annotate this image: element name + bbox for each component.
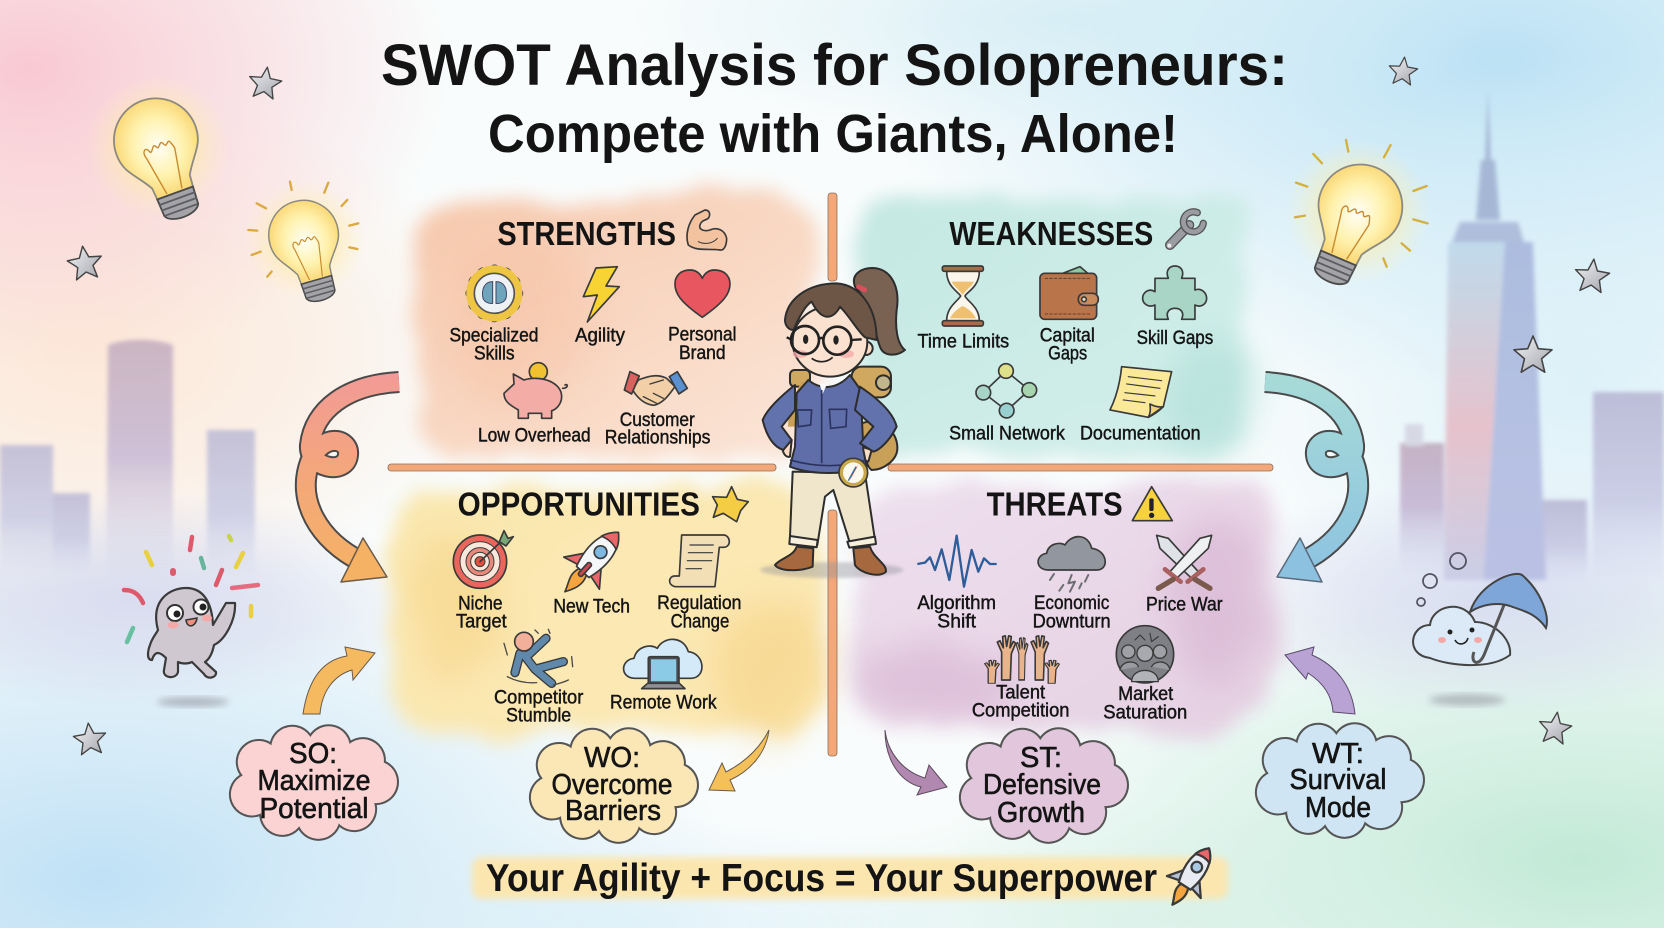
label: algorithm shift [917, 593, 996, 632]
label: economic downturn: Downturn [1033, 611, 1111, 632]
icon: wallet [1040, 267, 1098, 319]
label: regulation change: Change [671, 612, 729, 633]
icon: market saturation crowd [1116, 626, 1174, 683]
icon: target with arrow [453, 531, 513, 588]
icon: flexed muscle [687, 210, 727, 250]
strategy cloud: WO overcome barriers: Overcome [552, 769, 672, 801]
label: economic downturn [1033, 593, 1111, 632]
icon: puzzle piece [1143, 266, 1207, 319]
icon: stumbling competitor [504, 629, 573, 685]
strategy cloud: WT survival mode: Survival [1290, 764, 1386, 796]
strategy cloud: ST defensive growth [974, 742, 1110, 829]
panel wash: weaknesses [854, 198, 1260, 460]
strategy cloud: SO maximize potential: SO: [289, 738, 337, 770]
icon: rocket [547, 516, 636, 608]
skyline right with tall tower [1400, 90, 1664, 580]
strategy arrow: ST [885, 730, 947, 795]
icon: shining light bulb right [1262, 118, 1452, 310]
icon: shining light bulb left [231, 166, 380, 317]
icon: raised hands talent competition [985, 636, 1059, 683]
heading: weaknesses: WEAKNESSES [949, 216, 1153, 253]
icon: storm cloud [1038, 537, 1105, 592]
label: market saturation: Saturation [1103, 702, 1187, 723]
panel: weaknesses [917, 212, 1213, 444]
label: capital gaps [1040, 326, 1095, 364]
mascot: cloud with umbrella [1413, 553, 1547, 706]
icon: regulation scroll [670, 535, 729, 587]
title [381, 33, 1288, 164]
icon: cloud with laptop [624, 639, 702, 689]
icon: wrench [1167, 212, 1203, 248]
strategy cloud: SO maximize potential: Maximize [258, 765, 370, 797]
character: solopreneur with backpack and compass [760, 268, 905, 578]
label: algorithm shift: Algorithm [917, 593, 996, 614]
icon: piggy bank [504, 363, 567, 418]
panel: opportunities [453, 487, 748, 727]
icon: heart personal brand [675, 270, 730, 317]
label: customer relationships: Customer [620, 410, 695, 431]
icon: handshake [624, 372, 687, 405]
strategy cloud: ST defensive growth: Defensive [983, 769, 1101, 801]
arrow: strengths to opportunities loop [306, 382, 399, 582]
label: competitor stumble: Stumble [506, 706, 571, 727]
label: specialized skills: Specialized [449, 326, 538, 347]
strategy cloud: SO maximize potential [244, 738, 380, 825]
panel wash: opportunities [392, 488, 830, 740]
heading: threats: THREATS [987, 487, 1123, 524]
strategy cloud: WT survival mode [1270, 738, 1406, 824]
label: market saturation: Market [1118, 684, 1174, 705]
strategy cloud: WT survival mode: Mode [1305, 792, 1371, 824]
label: personal brand: Personal [668, 325, 736, 346]
label: customer relationships: Relationships [605, 427, 710, 448]
label: new tech: New Tech [553, 596, 630, 617]
label: agility: Agility [575, 326, 625, 347]
label: personal brand [668, 325, 736, 364]
strategy cloud: WT survival mode: WT: [1312, 738, 1364, 770]
icon: small network [976, 364, 1037, 418]
icon: specialized skills badge [470, 269, 518, 317]
icon: small rocket [1156, 837, 1226, 916]
strategy cloud: WO overcome barriers [544, 742, 680, 827]
panel wash: threats [850, 488, 1270, 730]
icon: light bulb top left [66, 54, 251, 242]
strategy cloud: SO maximize potential: Potential [260, 793, 368, 825]
icon: warning triangle [1132, 487, 1172, 521]
label: talent competition: Talent [996, 682, 1046, 703]
strategy arrow: SO [303, 647, 375, 714]
icon: gold star [713, 487, 748, 522]
label: specialized skills: Skills [474, 343, 515, 364]
bottom banner: superpower tagline: Your Agility + Focus = Your Superpower [486, 857, 1157, 900]
strategy cloud: ST defensive growth: Growth [997, 797, 1085, 829]
label: talent competition: Competition [972, 701, 1069, 722]
label: small network: Small Network [949, 423, 1065, 444]
label: skill gaps: Skill Gaps [1137, 328, 1213, 349]
strategy arrow: WT [1285, 647, 1355, 714]
icon: algorithm wave [917, 536, 997, 587]
title: SWOT Analysis for Solopreneurs: [381, 33, 1288, 98]
strategy cloud: WO overcome barriers: Barriers [565, 795, 661, 827]
heading: opportunities: OPPORTUNITIES [458, 487, 700, 524]
label: economic downturn: Economic [1034, 593, 1109, 614]
bottom banner: superpower tagline [472, 837, 1228, 916]
arrow: weaknesses to threats loop [1265, 382, 1358, 582]
label: specialized skills [449, 326, 538, 364]
label: low overhead: Low Overhead [478, 426, 591, 447]
label: capital gaps: Capital [1040, 326, 1095, 347]
label: price war: Price War [1146, 595, 1223, 616]
label: regulation change [657, 593, 741, 633]
label: remote work: Remote Work [610, 692, 717, 713]
panel: strengths [449, 210, 736, 448]
label: talent competition [972, 682, 1069, 722]
label: personal brand: Brand [679, 343, 726, 364]
label: time limits: Time Limits [917, 332, 1009, 353]
label: niche target [456, 593, 507, 633]
label: niche target: Niche [458, 593, 502, 614]
skyline left [0, 340, 255, 575]
label: algorithm shift: Shift [937, 611, 977, 632]
panel: threats [917, 487, 1223, 723]
heading: strengths: STRENGTHS [497, 216, 676, 253]
label: market saturation [1103, 684, 1187, 723]
panel wash: strengths [418, 198, 814, 458]
icon: hourglass [942, 266, 983, 326]
label: competitor stumble [494, 687, 583, 727]
title: Compete with Giants, Alone! [488, 104, 1178, 164]
icon: lightning bolt agility [583, 267, 619, 322]
label: documentation: Documentation [1080, 423, 1201, 444]
icon: crossed swords [1157, 535, 1212, 588]
decorative stars [66, 56, 1611, 755]
icon: documentation note [1110, 367, 1172, 417]
strategy cloud: WO overcome barriers: WO: [584, 742, 640, 774]
label: competitor stumble: Competitor [494, 687, 583, 708]
label: capital gaps: Gaps [1048, 343, 1087, 364]
mascot: celebrating blob with confetti [124, 536, 258, 707]
strategy cloud: ST defensive growth: ST: [1020, 742, 1062, 774]
strategy arrow: WO [709, 730, 769, 791]
label: regulation change: Regulation [657, 593, 741, 614]
label: customer relationships [605, 410, 710, 448]
quadrant cross dividers [388, 193, 1273, 756]
label: niche target: Target [456, 612, 507, 633]
